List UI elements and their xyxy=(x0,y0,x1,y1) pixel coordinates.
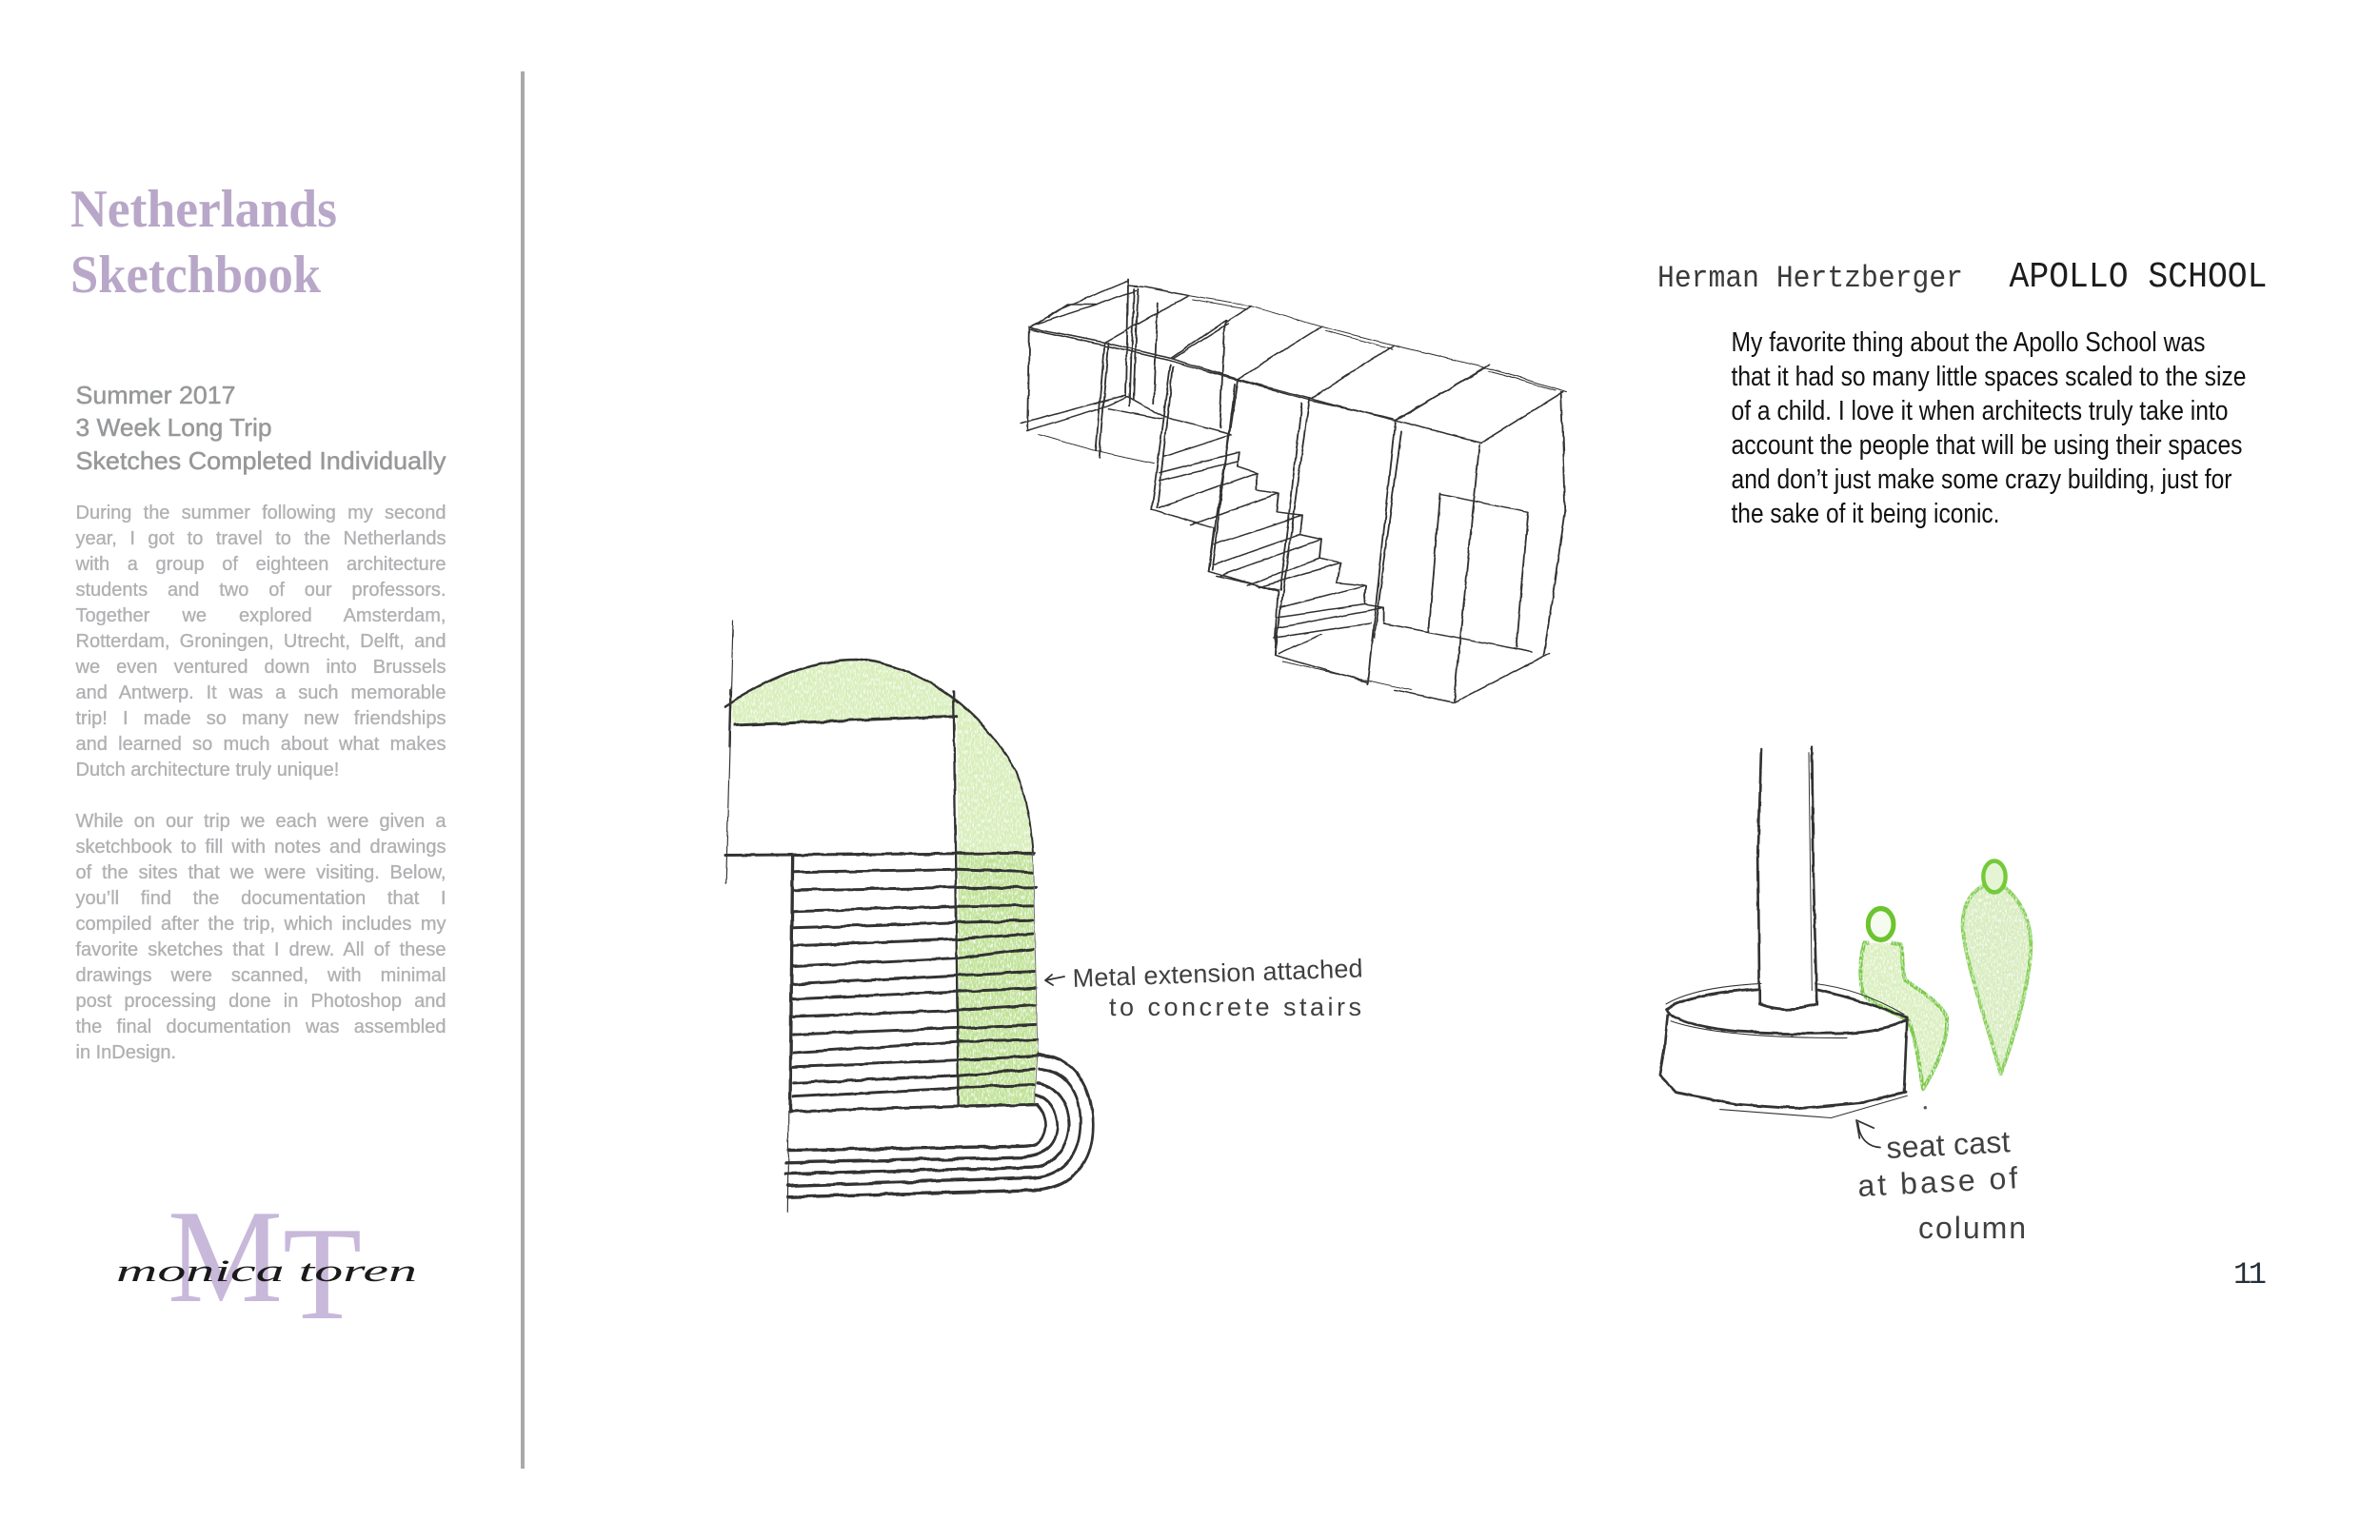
documentation paragraph: of the sites that we were visiting. Below, xyxy=(76,862,446,883)
project description: the sake of it being iconic. xyxy=(1731,499,1999,529)
annotation: metal extension xyxy=(1045,954,1363,1021)
green seated figure xyxy=(1860,909,1947,1089)
sketch: plan of stairs with metal extension xyxy=(725,622,1093,1212)
green standing figure xyxy=(1963,861,2031,1074)
project title: APOLLO SCHOOL xyxy=(2009,257,2268,298)
documentation paragraph: compiled after the trip, which includes my xyxy=(76,914,446,935)
intro paragraph: with a group of eighteen architecture xyxy=(76,554,446,575)
trip details: 3 Week Long Trip xyxy=(76,413,272,442)
intro paragraph: During the summer following my second xyxy=(76,503,446,523)
project description: that it had so many little spaces scaled to the size xyxy=(1731,362,2247,392)
intro paragraph: we even ventured down into Brussels xyxy=(76,657,446,678)
title: Sketchbook xyxy=(70,246,322,305)
green metal extension xyxy=(731,660,1038,1105)
title xyxy=(70,180,337,305)
intro paragraph xyxy=(75,503,446,780)
documentation paragraph: sketchbook to fill with notes and drawings xyxy=(76,837,446,858)
sketch: stair section perspective xyxy=(1021,279,1567,702)
sidebar divider xyxy=(521,71,525,1469)
logo: monogram and signature: T xyxy=(283,1200,362,1348)
intro paragraph: and Antwerp. It was a such memorable xyxy=(76,682,446,703)
documentation paragraph: you’ll find the documentation that I xyxy=(76,888,446,909)
sketch: column with seat and figures xyxy=(1659,747,2031,1148)
trip details: Sketches Completed Individually xyxy=(76,446,446,475)
documentation paragraph: post processing done in Photoshop and xyxy=(76,991,446,1012)
documentation paragraph: While on our trip we each were given a xyxy=(76,811,446,832)
annotation: seat cast: column xyxy=(1918,1211,2026,1245)
intro paragraph: Dutch architecture truly unique! xyxy=(76,760,339,780)
documentation paragraph: favorite sketches that I drew. All of these xyxy=(76,939,446,960)
project description xyxy=(1731,327,2247,529)
annotation: seat cast: at base of xyxy=(1856,1160,2018,1203)
intro paragraph: Rotterdam, Groningen, Utrecht, Delft, and xyxy=(76,631,446,652)
annotation: metal extension: to concrete stairs xyxy=(1109,993,1361,1021)
intro paragraph: Together we explored Amsterdam, xyxy=(76,605,446,626)
intro paragraph: students and two of our professors. xyxy=(76,580,446,601)
logo: monogram and signature: M xyxy=(168,1183,283,1331)
project description: and don’t just make some crazy building, just for xyxy=(1731,464,2232,495)
annotation: seat cast xyxy=(1856,1124,2026,1245)
annotation: seat cast: seat cast xyxy=(1885,1124,2011,1165)
intro paragraph: trip! I made so many new friendships xyxy=(76,708,446,729)
project description: My favorite thing about the Apollo School was xyxy=(1731,327,2205,358)
logo: monogram and signature: monica toren xyxy=(116,1254,417,1289)
architect name: Herman Hertzberger xyxy=(1657,261,1963,296)
documentation paragraph: in InDesign. xyxy=(76,1042,176,1063)
title: Netherlands xyxy=(70,180,337,239)
project description: account the people that will be using their spaces xyxy=(1731,430,2243,461)
project description: of a child. I love it when architects truly take into xyxy=(1731,396,2228,426)
documentation paragraph: drawings were scanned, with minimal xyxy=(76,965,446,986)
logo: monogram and signature xyxy=(116,1183,417,1348)
documentation paragraph xyxy=(75,811,446,1063)
documentation paragraph: the final documentation was assembled xyxy=(76,1017,446,1037)
trip details: Summer 2017 xyxy=(76,381,236,409)
annotation: metal extension: Metal extension attached xyxy=(1072,954,1363,993)
trip details xyxy=(76,381,446,475)
page number: 11 xyxy=(2233,1257,2267,1293)
intro paragraph: and learned so much about what makes xyxy=(76,734,446,755)
intro paragraph: year, I got to travel to the Netherlands xyxy=(76,528,446,549)
